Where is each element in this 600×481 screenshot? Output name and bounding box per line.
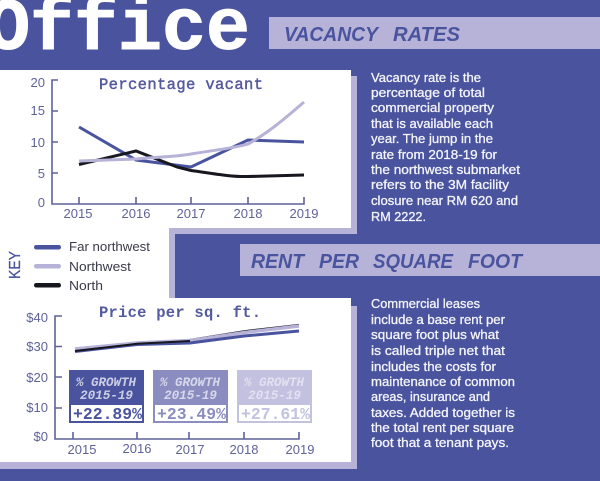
heading band: rent per square foot: FOOT <box>468 250 523 273</box>
growth box: north: +27.61% <box>241 406 311 425</box>
x axis labels: 2016 <box>122 206 150 221</box>
text block: vacancy rate <box>371 70 520 224</box>
growth box: far northwest <box>69 370 144 425</box>
x axis labels <box>68 441 314 457</box>
x axis labels: 2015 <box>68 442 96 457</box>
y axis labels: $20 <box>26 370 48 385</box>
text block: vacancy rate: year. The jump in the <box>371 131 493 146</box>
text block: commercial leases: square foot plus what <box>371 327 499 342</box>
chart title: Price per sq. ft. <box>99 304 261 322</box>
x axis labels: 2016 <box>123 441 151 456</box>
text block: commercial leases: include a base rent per <box>371 312 506 327</box>
key <box>7 239 150 293</box>
text block: vacancy rate: Vacancy rate is the <box>371 70 481 85</box>
growth box: north <box>237 370 312 425</box>
text block: vacancy rate: RM 2222. <box>371 209 426 224</box>
key: far northwest <box>34 239 150 254</box>
x axis labels: 2017 <box>176 442 204 457</box>
text block: vacancy rate: commercial property <box>371 100 495 115</box>
growth box: north: 2015-19 <box>248 389 301 403</box>
x axis labels: 2015 <box>64 206 92 221</box>
y axis labels: $30 <box>26 339 48 354</box>
text block: commercial leases: the total rent per square <box>371 420 514 435</box>
text block: commercial leases: foot that a tenant pays. <box>371 435 509 450</box>
y axis labels: 20 <box>31 75 45 90</box>
key: northwest <box>34 259 131 274</box>
x axis labels: 2017 <box>177 206 205 221</box>
text block: vacancy rate: the northwest submarket <box>371 162 520 177</box>
growth box: north: % GROWTH <box>243 376 304 390</box>
growth box: northwest: 2015-19 <box>164 389 217 403</box>
line chart: price per square foot <box>26 304 314 457</box>
y axis labels: 5 <box>38 166 45 181</box>
text block: commercial leases: maintenance of common <box>371 374 515 389</box>
growth box: northwest: % GROWTH <box>159 376 220 390</box>
y axis labels: $10 <box>26 400 48 415</box>
line: north, lower section <box>75 341 190 351</box>
key: north: North <box>69 278 103 293</box>
line chart: percentage vacant <box>31 75 318 221</box>
text block: vacancy rate: that is available each <box>371 116 493 131</box>
text block: commercial leases <box>371 296 516 450</box>
x axis labels: 2018 <box>230 442 258 457</box>
heading band: rent per square foot <box>240 244 600 276</box>
x axis labels: 2018 <box>234 206 262 221</box>
y axis labels: 0 <box>38 195 45 210</box>
y axis labels: 15 <box>31 103 45 118</box>
line: north, upper section <box>190 324 299 340</box>
text block: vacancy rate: refers to the 3M facility <box>371 177 510 192</box>
text block: commercial leases: Commercial leases <box>371 296 480 311</box>
text block: commercial leases: includes the costs for <box>371 359 497 374</box>
axes <box>55 316 299 439</box>
y axis labels <box>31 75 45 210</box>
y axis labels: 10 <box>31 135 45 150</box>
text block: vacancy rate: closure near RM 620 and <box>371 193 518 208</box>
heading band: vacancy rates: RATES <box>393 23 460 46</box>
x axis labels: 2019 <box>286 442 314 457</box>
growth box: far northwest: % GROWTH <box>75 376 136 390</box>
x axis labels <box>64 206 318 221</box>
heading band: rent per square foot: PER <box>319 250 359 273</box>
line: northwest <box>75 326 299 349</box>
y axis labels: $40 <box>26 310 48 325</box>
growth box: far northwest: 2015-19 <box>80 389 133 403</box>
key label: KEY <box>7 251 24 279</box>
key: northwest: Northwest <box>69 259 131 274</box>
heading band: vacancy rates: VACANCY <box>284 23 380 46</box>
growth box: northwest: +23.49% <box>157 406 227 425</box>
text block: commercial leases: is called triple net that <box>371 343 505 358</box>
key: far northwest: Far northwest <box>69 239 150 254</box>
axes <box>52 80 304 204</box>
heading band: vacancy rates <box>269 17 600 49</box>
line: far northwest <box>79 127 304 167</box>
panel shadow <box>0 76 357 469</box>
text block: vacancy rate: rate from 2018-19 for <box>371 147 498 162</box>
line: far northwest <box>75 331 299 352</box>
x axis labels: 2019 <box>290 206 318 221</box>
heading band: rent per square foot: SQUARE <box>373 250 454 273</box>
y axis labels <box>26 310 48 444</box>
growth box: northwest <box>153 370 228 425</box>
key: north <box>34 278 103 293</box>
text block: vacancy rate: percentage of total <box>371 85 485 100</box>
heading band: rent per square foot: RENT <box>251 250 305 273</box>
text block: commercial leases: taxes. Added together is <box>371 405 516 420</box>
chart title: Percentage vacant <box>99 76 263 94</box>
line: northwest <box>79 102 304 161</box>
growth box: far northwest: +22.89% <box>73 406 143 425</box>
line: north <box>79 151 304 177</box>
y axis labels: $0 <box>34 429 48 444</box>
panel: white chart area <box>0 70 351 462</box>
text block: commercial leases: areas, insurance and <box>371 389 490 404</box>
